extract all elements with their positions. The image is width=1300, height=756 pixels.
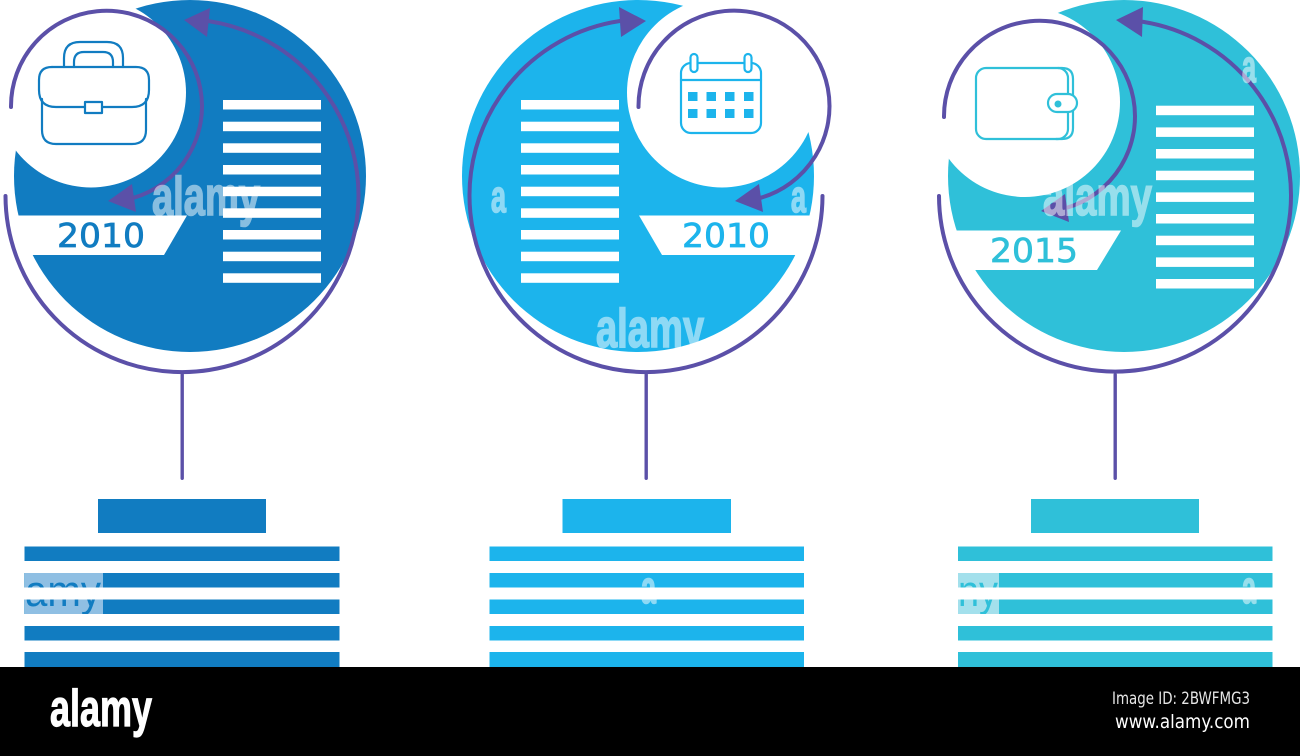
connector stem (644, 373, 648, 480)
year label: 2010 (682, 216, 770, 255)
watermark: letter lower middle: a (641, 562, 657, 613)
lower text bars (958, 546, 1272, 667)
panel: 2015 wallet (930, 0, 1300, 667)
watermark: letter teal: a (1242, 41, 1257, 92)
watermark: lower right patch: ny (958, 567, 998, 616)
arrowhead: inner ring (108, 184, 136, 212)
arrow: inner ring (638, 11, 829, 198)
arrow: outer ring (6, 21, 358, 372)
arrowhead: outer ring (619, 7, 646, 37)
footer bar (0, 667, 1300, 756)
arrowhead: outer ring (1116, 7, 1143, 37)
website: www.alamy.com (1115, 711, 1250, 733)
icon: wallet (976, 68, 1077, 139)
arrow: outer ring (470, 21, 822, 372)
text placeholder lines (223, 100, 321, 283)
watermark: letter lower right: a (1242, 562, 1257, 613)
sky blue main circle (462, 0, 814, 352)
icon: briefcase (39, 42, 149, 144)
image id: Image ID: 2BWFMG3 (1112, 689, 1250, 709)
heading block (98, 499, 266, 533)
arrow: inner ring (944, 21, 1135, 208)
watermark: panel three: alamy (1043, 165, 1152, 227)
watermark: letter right: a (791, 171, 807, 222)
watermark: letter left: a (491, 171, 507, 222)
arrowhead: inner ring (735, 184, 763, 212)
teal main circle (948, 0, 1300, 352)
heading block (562, 499, 731, 533)
arrowhead: inner ring (1041, 194, 1069, 222)
white icon circle (627, 0, 817, 188)
year ribbon (639, 216, 830, 255)
year label: 2010 (57, 216, 145, 255)
connector stem (1114, 373, 1117, 480)
text placeholder lines (1156, 106, 1254, 288)
arrow: outer ring (939, 22, 1291, 372)
watermark: lower left patch: amy (25, 567, 101, 616)
year label: 2015 (990, 231, 1078, 270)
white icon circle (930, 7, 1120, 197)
arrow: inner ring (11, 11, 202, 198)
footer logo: alamy (50, 680, 152, 738)
white icon circle (0, 0, 186, 188)
connector stem (180, 373, 184, 480)
watermark: panel one: alamy (152, 165, 260, 227)
panel: 2010 briefcase (0, 0, 366, 667)
year ribbon (930, 230, 1121, 270)
text placeholder lines (521, 100, 619, 283)
heading block (1031, 499, 1199, 533)
panel: 2010 calendar (462, 0, 830, 667)
lower text bars (24, 546, 340, 667)
year ribbon (0, 216, 187, 255)
watermarks (25, 41, 1257, 616)
lower text bars (490, 546, 804, 667)
watermark: panel two: alamy (596, 297, 704, 359)
arrowhead: outer ring (184, 8, 210, 37)
icon: calendar (681, 54, 761, 133)
blue main circle (14, 0, 366, 352)
